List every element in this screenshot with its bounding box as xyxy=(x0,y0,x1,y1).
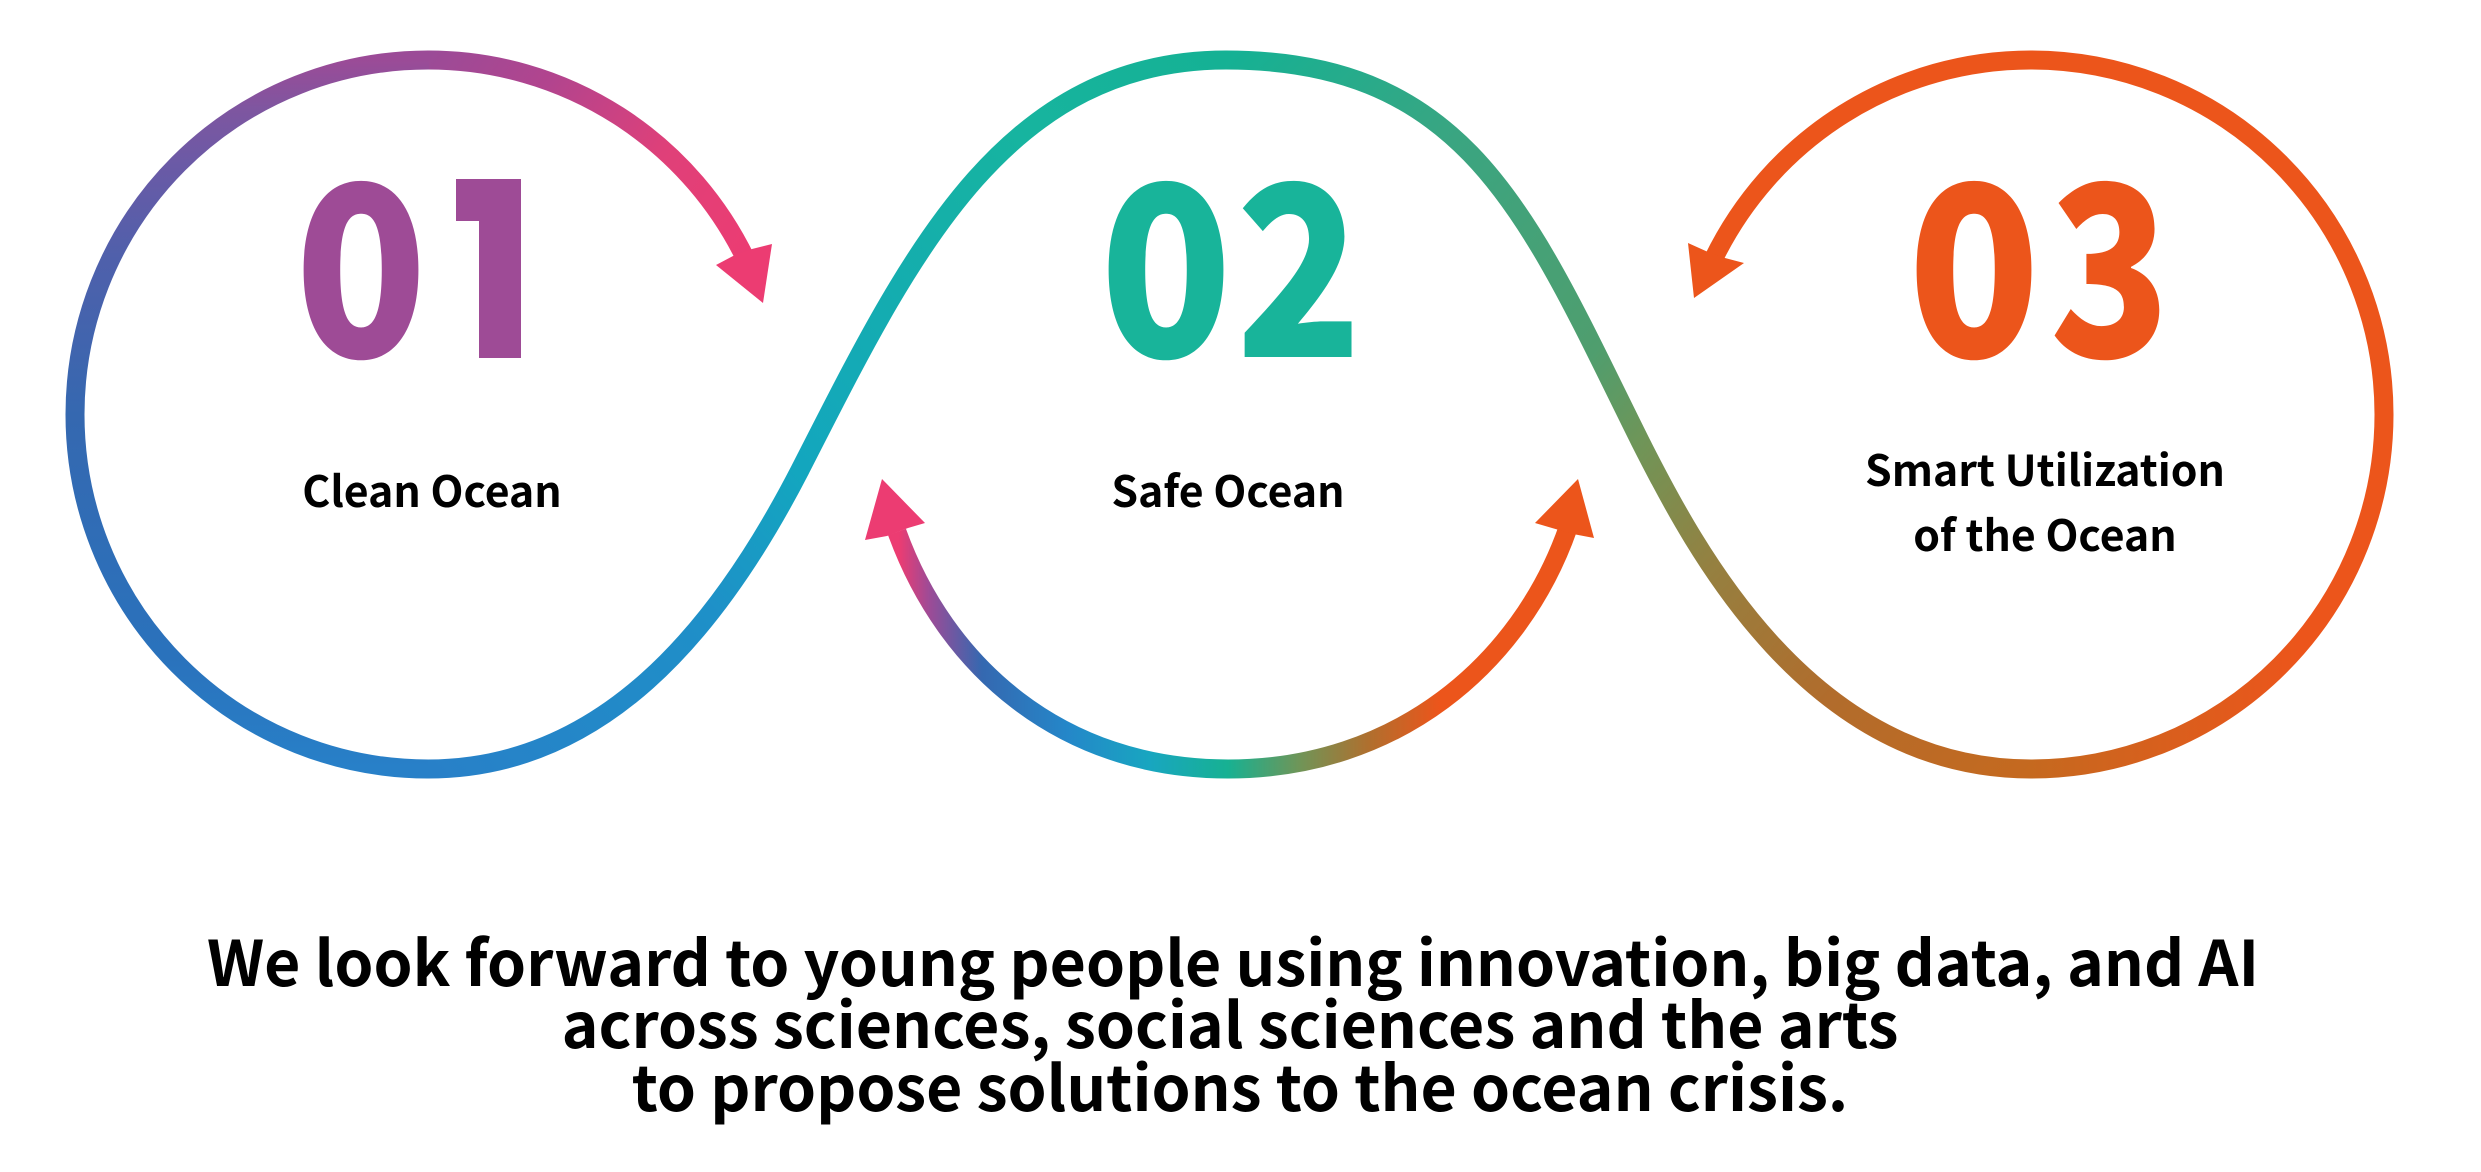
number 01: 1 xyxy=(414,81,558,426)
label: Smart Utilization of the Ocean xyxy=(1865,437,2225,564)
infinity ribbon arrow: main looping path xyxy=(75,60,2384,769)
number 03 xyxy=(1908,81,2170,426)
number 01: 0 xyxy=(295,81,427,426)
number 03: 3 xyxy=(2050,81,2170,426)
closing statement: to propose solutions to the ocean crisis. xyxy=(632,1038,1848,1129)
number 03: 0 xyxy=(1908,81,2040,426)
number 02 xyxy=(1100,81,1362,426)
label: Smart Utilization of the Ocean: Smart Utilization xyxy=(1865,437,2225,499)
ribbon: rising wave to second loop xyxy=(428,60,1226,769)
ribbon: bottom right of third loop xyxy=(2030,414,2384,769)
ribbon: top of third loop xyxy=(1713,60,2384,416)
label: Safe Ocean: Safe Ocean xyxy=(1111,458,1345,520)
ribbon: top right of first loop xyxy=(428,60,749,266)
lower double-headed arc xyxy=(897,528,1568,769)
label: Clean Ocean: Clean Ocean xyxy=(302,458,562,520)
ribbon: left side of first loop xyxy=(75,60,429,769)
ribbon: falling wave to third loop xyxy=(1225,60,2031,769)
closing statement xyxy=(207,913,2259,1129)
arrowhead: pink first loop xyxy=(716,244,772,303)
arrowhead: pink lower arc xyxy=(865,479,925,540)
number 01 xyxy=(304,179,521,360)
arrowhead: orange third loop xyxy=(1688,243,1744,298)
label: Smart Utilization of the Ocean: of the Ocean xyxy=(1913,502,2177,564)
closing statement: across sciences, social sciences and the arts xyxy=(562,975,1898,1066)
number 02: 2 xyxy=(1236,82,1362,426)
closing statement: We look forward to young people using innovation, big data, and AI xyxy=(207,913,2259,1004)
number 02: 0 xyxy=(1100,81,1232,426)
arrowhead: orange lower arc xyxy=(1535,479,1594,538)
